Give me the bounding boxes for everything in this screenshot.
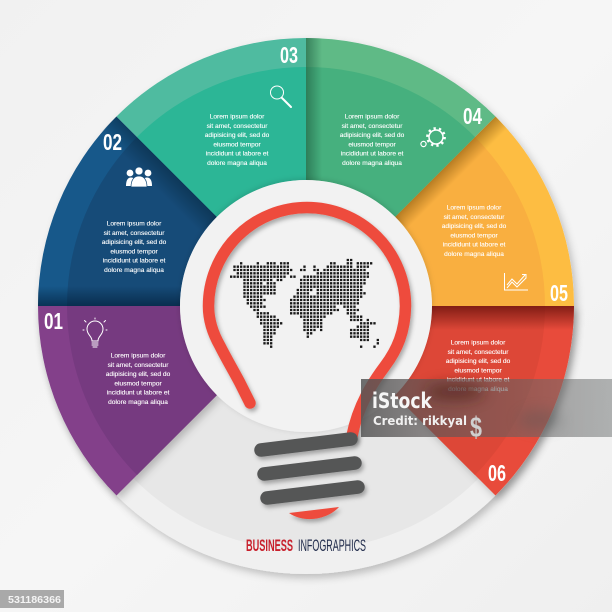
text block 05: sit amet, consectetur bbox=[444, 214, 505, 221]
text block 02: Lorem ipsum dolor bbox=[107, 220, 162, 228]
text block 01: Lorem ipsum dolor bbox=[111, 352, 166, 360]
panel: 02 navy bbox=[38, 116, 217, 306]
icon: magnifier bbox=[270, 86, 291, 107]
text block 06: dolore magna aliqua bbox=[448, 386, 508, 393]
bulb outline bbox=[208, 207, 406, 436]
text block 03: Lorem ipsum dolor bbox=[210, 114, 265, 120]
text block 01: sit amet, consectetur bbox=[108, 362, 169, 369]
icon: chart bbox=[504, 273, 528, 290]
text block 02: incididunt ut labore et bbox=[103, 258, 166, 265]
text block 02: sit amet, consectetur bbox=[104, 230, 165, 237]
text block 04: dolore magna aliqua bbox=[342, 160, 402, 167]
title: business infographics: BUSINESS bbox=[246, 537, 293, 555]
centre disc bbox=[180, 180, 432, 432]
text block 02: adipisicing elit, sed do bbox=[102, 239, 167, 246]
dotted world map bbox=[230, 260, 379, 347]
panel: 01 purple bbox=[38, 306, 217, 496]
panel: 05 yellow bbox=[395, 116, 574, 306]
text block 01: incididunt ut labore et bbox=[107, 390, 170, 397]
icon: gear bbox=[421, 128, 445, 147]
text block 04: adipisicing elit, sed do bbox=[340, 132, 405, 139]
text block 06: incididunt ut labore et bbox=[447, 377, 510, 384]
text block 02: dolore magna aliqua bbox=[104, 267, 164, 274]
text block 05: incididunt ut labore et bbox=[443, 242, 506, 249]
text block 03: dolore magna aliqua bbox=[207, 160, 267, 167]
text block 06: sit amet, consectetur bbox=[448, 349, 509, 356]
text block 04: eiusmod tempor bbox=[348, 141, 396, 148]
number 04: 04 bbox=[463, 103, 482, 129]
image id stamp: 531186366 bbox=[8, 594, 61, 606]
number 03: 03 bbox=[280, 42, 298, 68]
text block 01: eiusmod tempor bbox=[114, 380, 162, 387]
image id stamp bbox=[0, 590, 64, 608]
watermark text: iStock bbox=[372, 389, 433, 413]
text block 03: eiusmod tempor bbox=[213, 141, 261, 148]
text block 03: sit amet, consectetur bbox=[207, 123, 268, 130]
text block 02: eiusmod tempor bbox=[110, 248, 158, 255]
watermark band: Credit: rikkyal bbox=[373, 414, 467, 428]
number 02: 02 bbox=[103, 129, 122, 155]
panel: bottom grey sector bbox=[38, 38, 574, 574]
text block 04: sit amet, consectetur bbox=[342, 123, 403, 130]
text block 06: eiusmod tempor bbox=[454, 367, 502, 374]
title: business infographics: INFOGRAPHICS bbox=[298, 537, 366, 555]
illustration: light bulb bbox=[208, 207, 406, 519]
icon: people bbox=[126, 167, 152, 187]
text block 01: dolore magna aliqua bbox=[108, 399, 168, 406]
number 05: 05 bbox=[550, 280, 568, 306]
text block 05: Lorem ipsum dolor bbox=[447, 204, 502, 212]
bulb screw bars bbox=[261, 439, 358, 498]
number 01: 01 bbox=[44, 308, 63, 334]
text block 05: dolore magna aliqua bbox=[444, 251, 504, 258]
text block 05: adipisicing elit, sed do bbox=[442, 223, 507, 230]
panel: 04 green bbox=[306, 38, 496, 217]
text block 03: adipisicing elit, sed do bbox=[205, 132, 270, 139]
text block 01: adipisicing elit, sed do bbox=[106, 371, 171, 378]
icon: light bulb bbox=[83, 318, 107, 347]
watermark band bbox=[361, 379, 612, 437]
text block 04: Lorem ipsum dolor bbox=[345, 114, 400, 120]
panel: 03 teal bbox=[116, 38, 306, 217]
text block 05: eiusmod tempor bbox=[450, 232, 498, 239]
text block 04: incididunt ut labore et bbox=[341, 151, 404, 158]
text block 06: adipisicing elit, sed do bbox=[446, 358, 511, 365]
text block 03: incididunt ut labore et bbox=[206, 151, 269, 158]
panel: 06 red bbox=[395, 306, 574, 496]
number 06: 06 bbox=[488, 460, 506, 486]
icon: dollar: $ bbox=[470, 412, 482, 444]
text block 06: Lorem ipsum dolor bbox=[451, 340, 506, 346]
bulb tip bbox=[289, 507, 339, 519]
